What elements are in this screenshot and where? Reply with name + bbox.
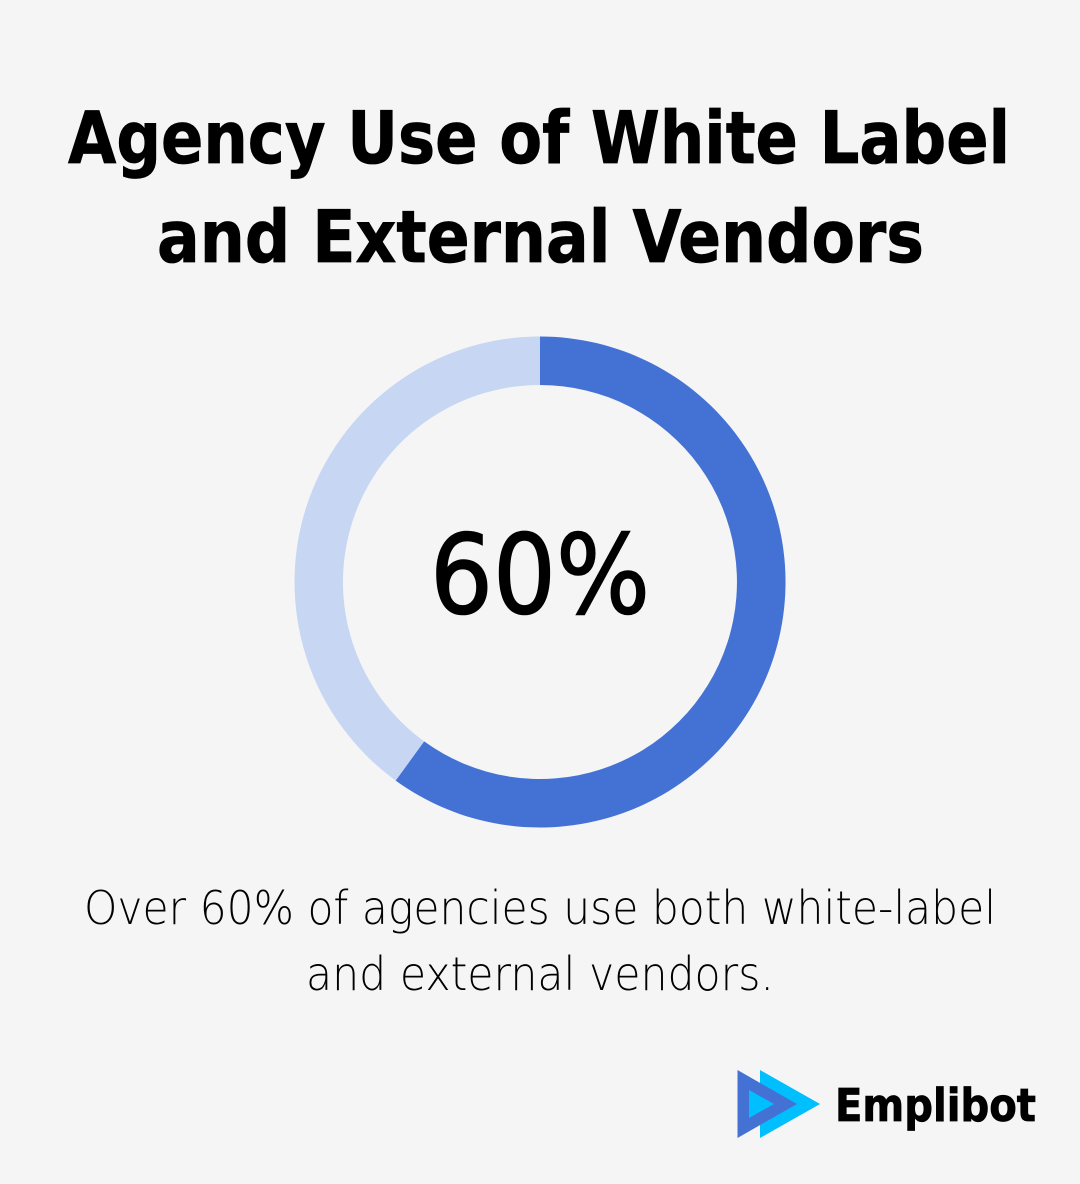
logo: Emplibot <box>738 1070 1036 1138</box>
donut value segment <box>396 336 786 827</box>
donut centre value: 60% <box>430 511 650 639</box>
description text: Over 60% of agencies use both white-label <box>84 881 996 935</box>
description text <box>84 881 996 1001</box>
logo wordmark: Emplibot <box>835 1079 1036 1132</box>
title <box>68 96 1010 279</box>
title: and External Vendors <box>157 195 924 279</box>
description text: and external vendors. <box>306 947 774 1001</box>
donut remainder segment <box>295 336 540 781</box>
icon: play triangles <box>738 1070 820 1138</box>
donut chart: 60% <box>295 336 786 827</box>
